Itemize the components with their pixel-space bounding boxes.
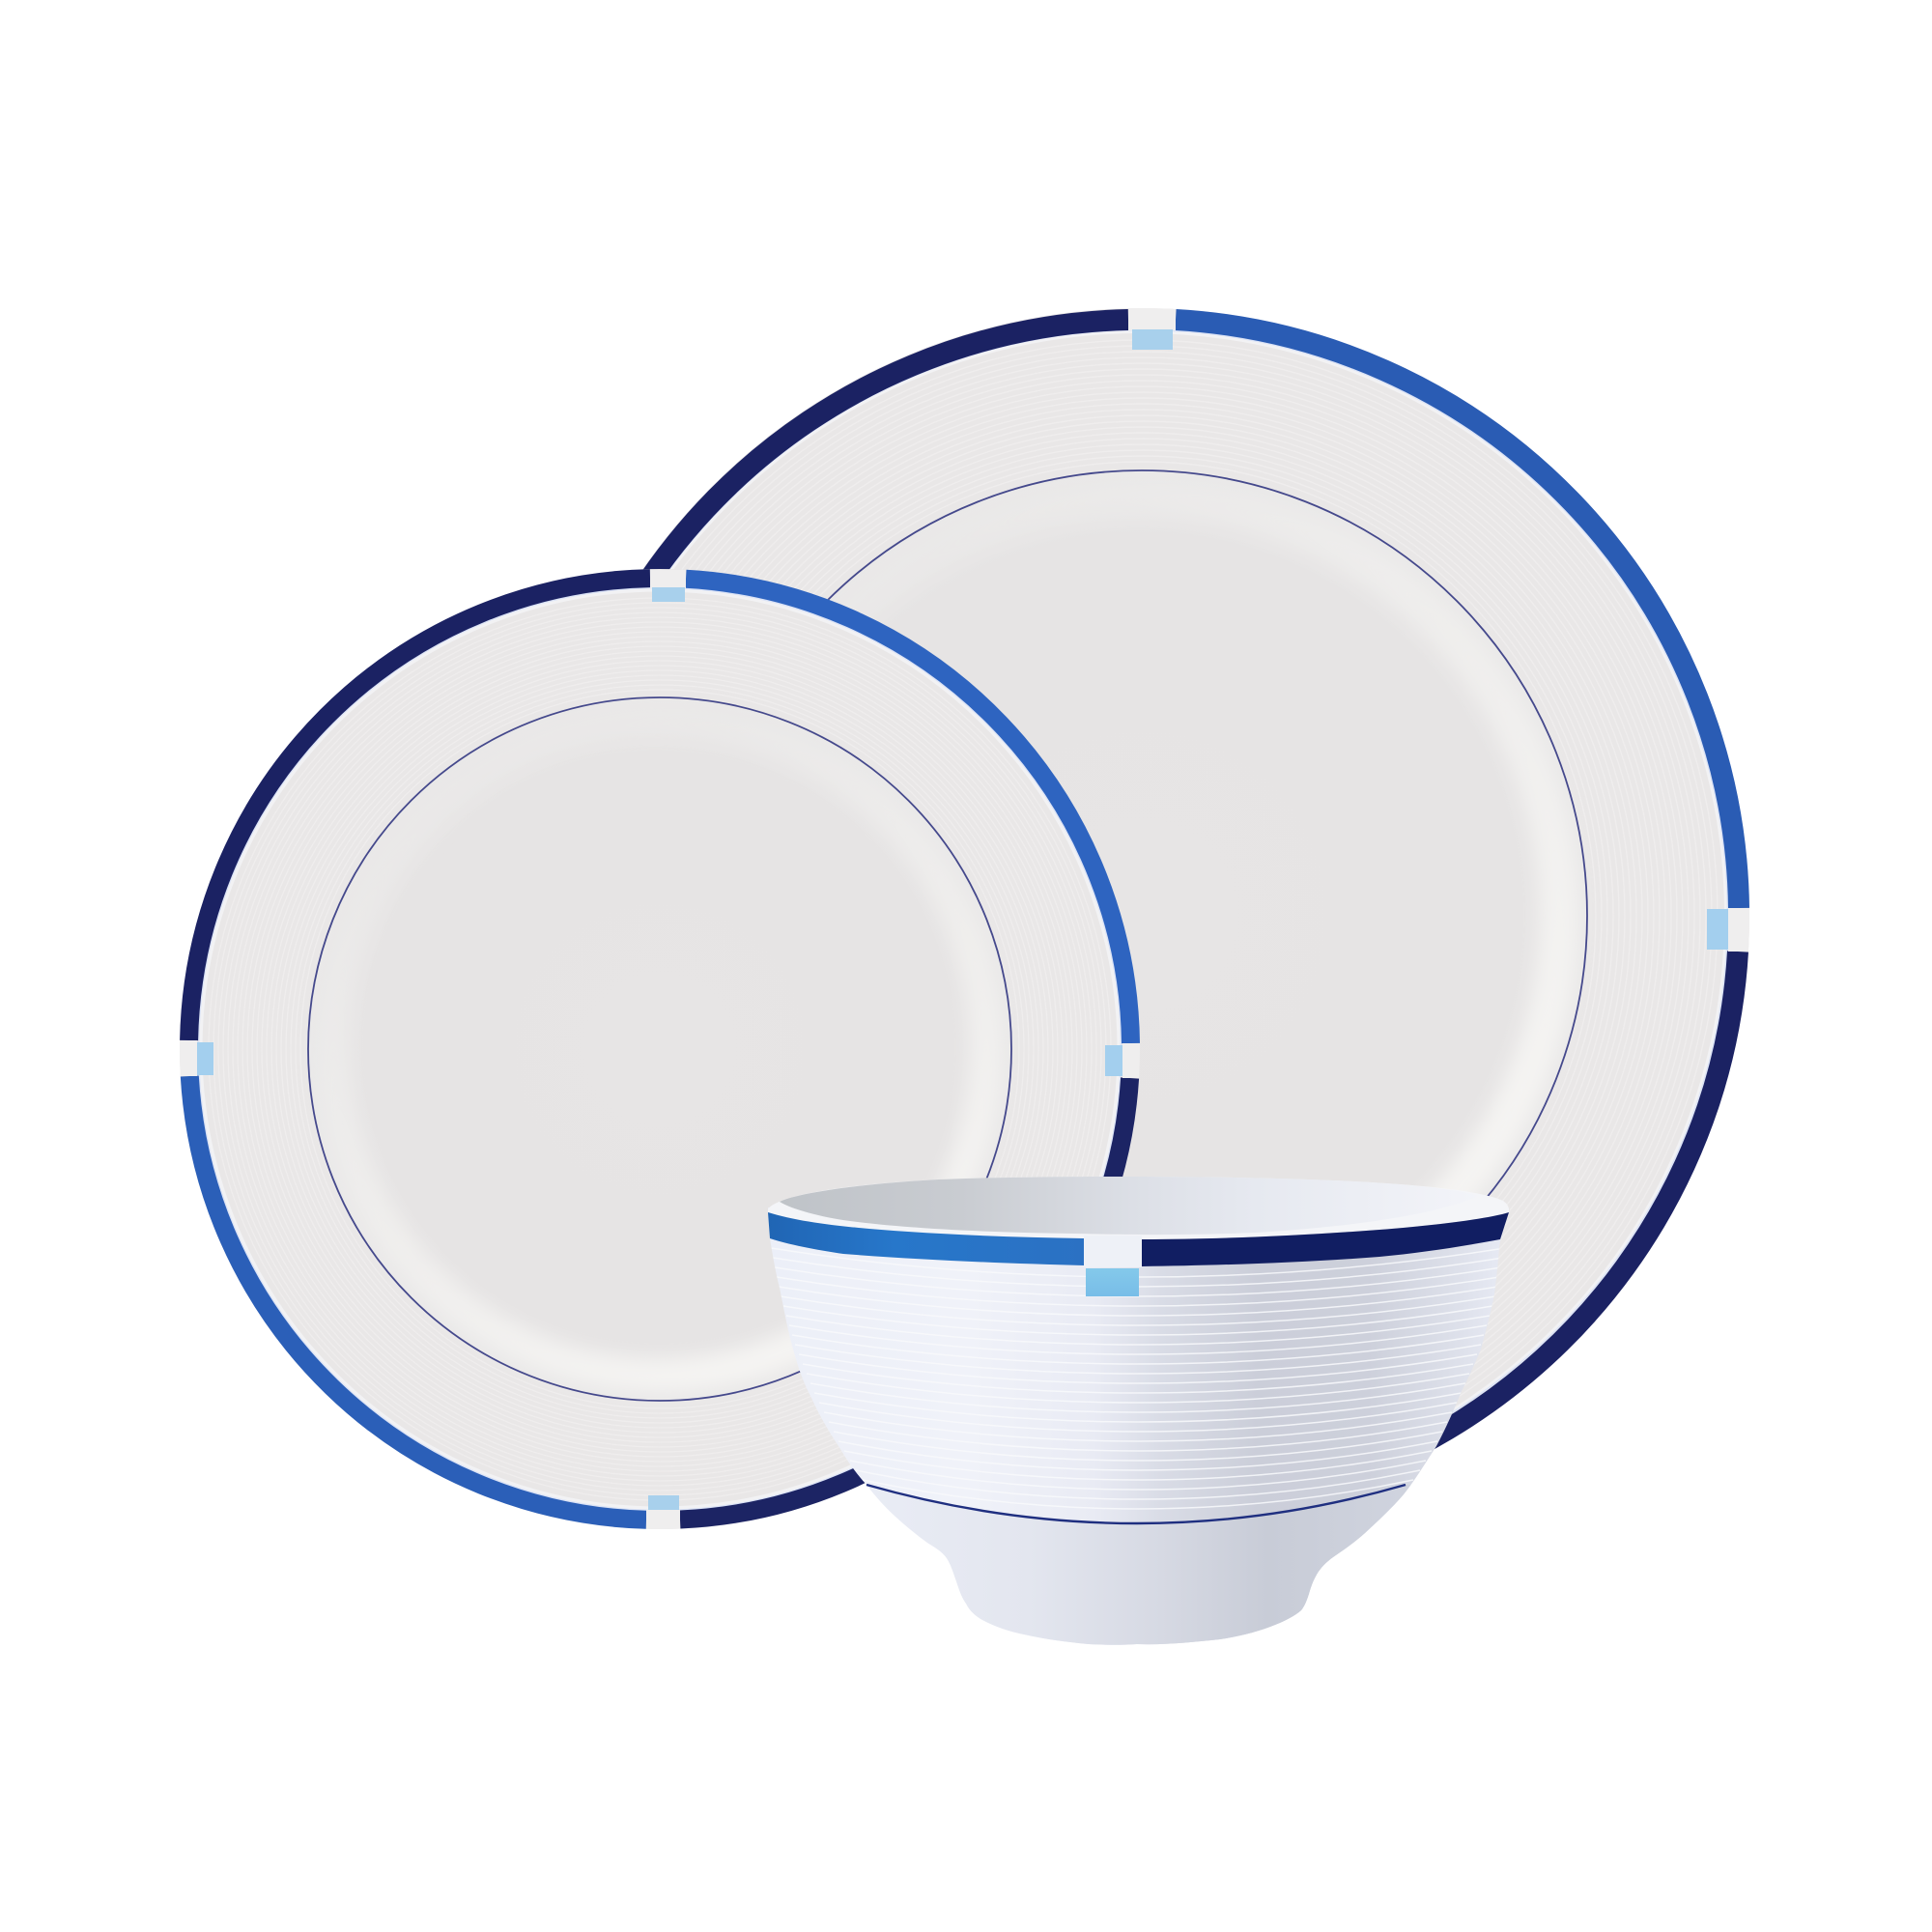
dinnerware illustration [180,308,1749,1645]
large dinner plate [643,308,1749,1449]
bowl foot line [867,1485,1406,1523]
blue rim arc [1176,320,1739,908]
small salad plate [180,569,1141,1529]
blue rim arc lower left [189,1076,646,1520]
bowl [753,1177,1526,1662]
blue rim arc upper right [686,579,1130,1043]
navy rim arc lower right [680,1078,1130,1520]
bowl body [768,1208,1509,1645]
inner rim line [696,470,1587,1361]
square markers [1128,307,1750,952]
bowl rim lip [768,1177,1509,1239]
square markers [180,570,1141,1529]
navy rim arc [545,320,1738,1514]
bowl interior [780,1177,1478,1235]
navy rim arc upper left [189,579,650,1040]
light blue bowl marker [1086,1268,1139,1296]
blue bowl band [768,1212,1084,1265]
inner rim line [308,697,1011,1401]
navy bowl band [1142,1212,1509,1266]
white bowl marker [1084,1236,1142,1267]
